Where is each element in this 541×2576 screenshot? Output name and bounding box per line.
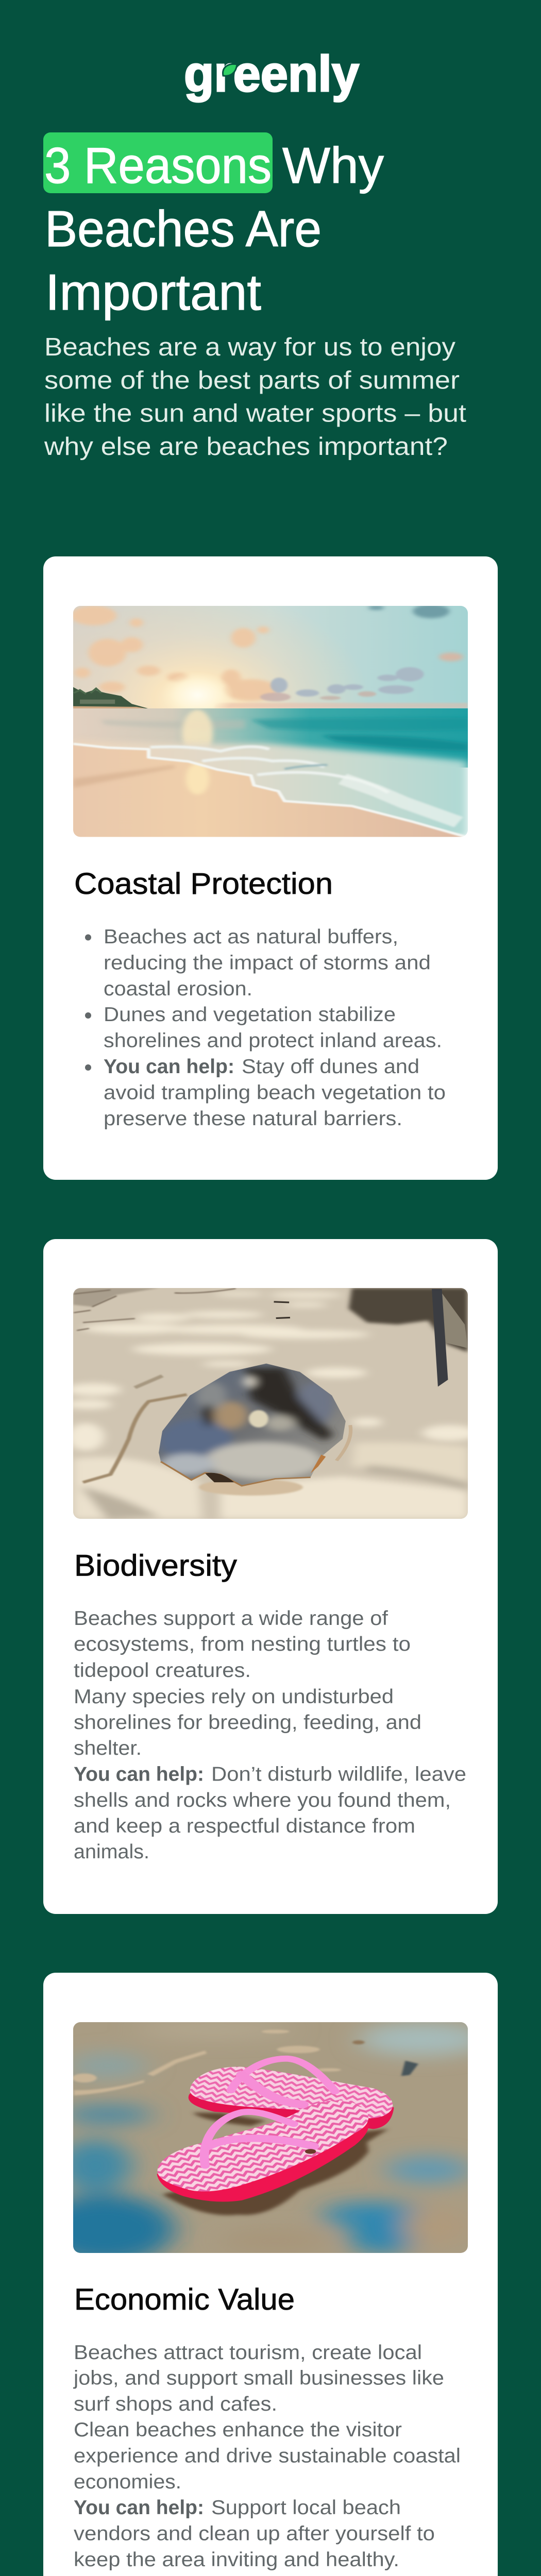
panel: coastal protection [43,556,498,1180]
body text: and keep a respectful distance from [74,1815,415,1837]
heading: biodiversity: Biodiversity [74,1549,237,1583]
body text [74,1607,466,1863]
heading: economic value: Economic Value [74,2283,295,2316]
sand [73,744,465,837]
shallow water [73,740,468,837]
intro text: some of the best parts of summer [44,367,460,395]
front flip flop [157,2100,369,2202]
rear flip flop [189,2059,394,2129]
photo: beach at sunset [71,604,468,837]
foam line [73,744,465,837]
panel: biodiversity [43,1239,498,1914]
body text: Support local beach [211,2497,401,2519]
bullet list: preserve these natural barriers. [104,1108,402,1130]
body text: keep the area inviting and healthy. [74,2549,399,2571]
body text: jobs, and support small businesses like [73,2367,444,2389]
bullet list: Beaches act as natural buffers, [104,926,398,948]
icon: leaf on logo [223,64,237,76]
bullet list [85,926,446,1130]
logo: greenly: greenly [184,45,359,102]
body text: You can help: [74,2497,204,2519]
bullet list: avoid trampling beach vegetation to [104,1082,446,1104]
body text: surf shops and cafes. [74,2393,277,2415]
body text: vendors and clean up after yourself to [74,2522,435,2545]
body text: experience and drive sustainable coastal [74,2445,461,2467]
body text [73,2342,461,2571]
photo: pink flip flops on wet sand [73,2022,468,2253]
body text: Beaches support a wide range of [74,1607,388,1630]
intro text: Beaches are a way for us to enjoy [44,333,456,361]
sand pile [199,1479,303,1496]
body text: Don’t disturb wildlife, leave [211,1763,466,1786]
title: Important [45,264,261,320]
body text: animals. [74,1841,149,1863]
root line [83,1395,187,1482]
bullet list: You can help: [104,1056,234,1078]
intro text [44,333,466,461]
body text: economies. [74,2471,181,2493]
title: Beaches Are [45,200,322,257]
driftwood and vegetation [73,1288,468,1386]
body text: shelter. [74,1737,142,1759]
panel: economic value [34,1973,498,2576]
body text: You can help: [74,1763,204,1786]
intro text: like the sun and water sports – but [44,400,466,428]
bullet list: shorelines and protect inland areas. [104,1029,442,1052]
sea [73,708,468,768]
bullet list: coastal erosion. [104,978,252,1000]
turtle shell [159,1364,346,1486]
photo: turtle on sand [66,1288,477,1519]
intro text: why else are beaches important? [44,433,448,461]
shadow under flip flops [162,2113,388,2215]
body text: Beaches attract tourism, create local [74,2342,422,2364]
body text: ecosystems, from nesting turtles to [74,1633,411,1655]
bullet list: Stay off dunes and [242,1056,419,1078]
title: 3 Reasons [44,137,272,194]
body text: shells and rocks where you found them, [74,1789,451,1811]
bullet list: Dunes and vegetation stabilize [104,1004,396,1026]
title highlight [43,132,273,193]
title: Why [282,137,384,194]
body text: Many species rely on undisturbed [74,1686,394,1708]
palm island [73,687,148,708]
bullet list: reducing the impact of storms and [104,952,431,974]
body text: shorelines for breeding, feeding, and [74,1711,421,1734]
heading: coastal protection: Coastal Protection [74,867,333,901]
body text: tidepool creatures. [74,1659,251,1682]
body text: Clean beaches enhance the visitor [74,2419,402,2441]
title [43,132,384,320]
